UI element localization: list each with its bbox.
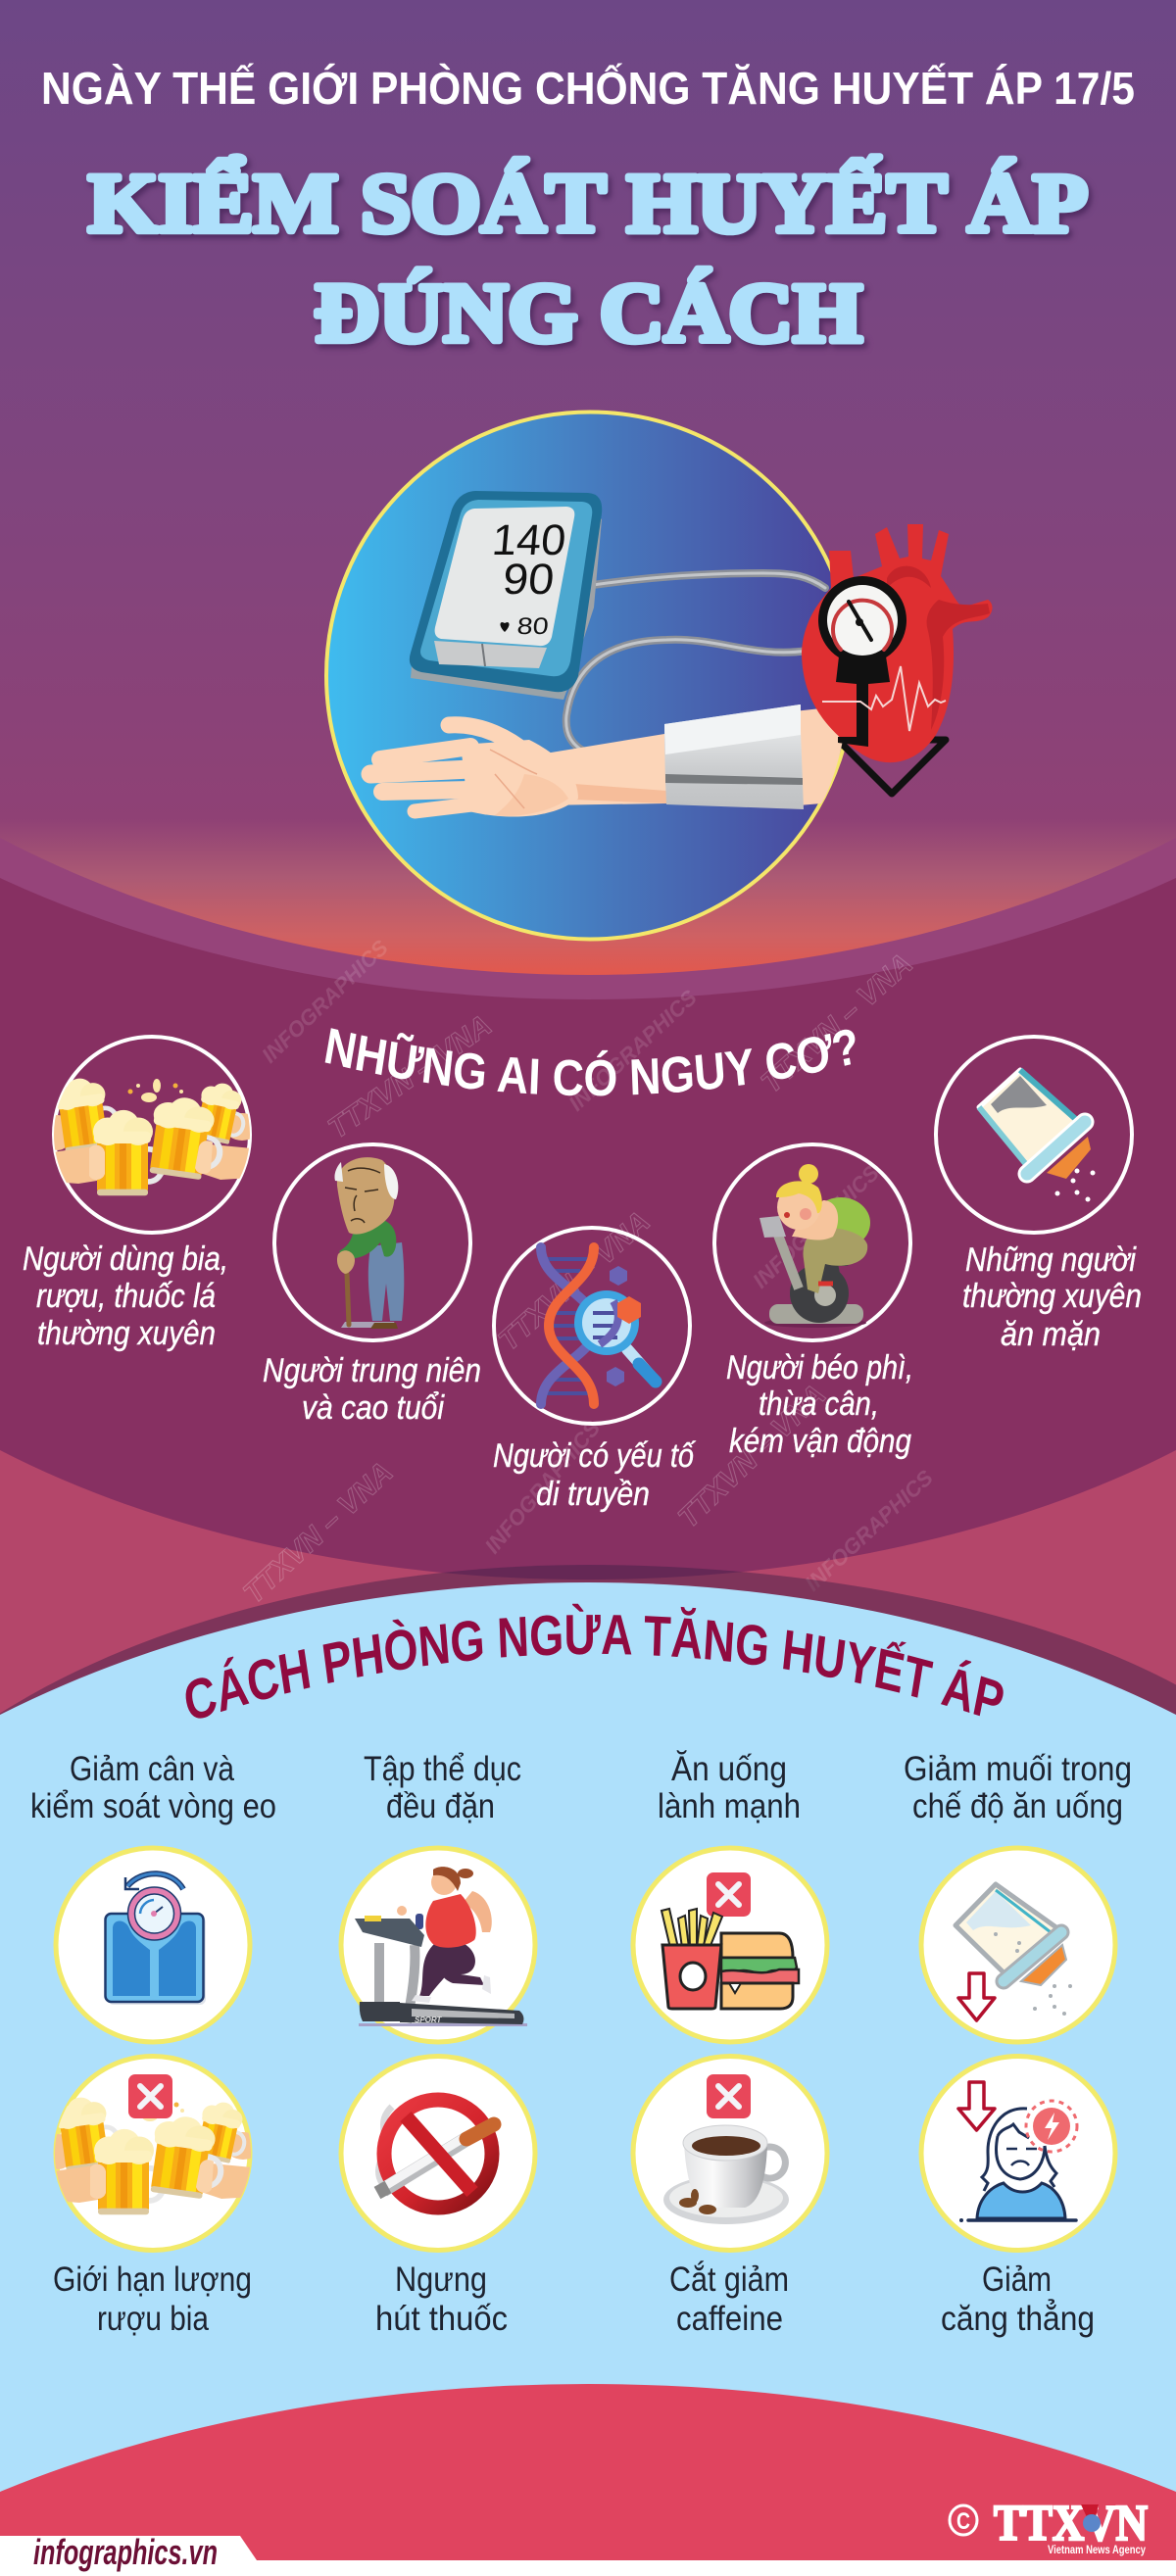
watermarks: TTXVN – VNA (237, 1456, 399, 1610)
prevention 2: exercise: Tập thể dục (364, 1750, 521, 1788)
prevention 6: stop smoking: hút thuốc (375, 2300, 508, 2338)
heading: those at risk: NHỮNG AI CÓ NGUY CƠ? (325, 1028, 855, 1095)
prevention 4: less salt: Giảm muối trong (904, 1750, 1132, 1788)
panel: dome shadow (0, 1565, 1176, 1862)
risk 1: beer and alcohol: thường xuyên (37, 1315, 216, 1352)
panel: lighter band (0, 0, 1176, 999)
risk 5: salty food (936, 1037, 1142, 1353)
prevention 5: limit alcohol: Giới hạn lượng (53, 2260, 252, 2299)
title: KIỂM SOÁT HUYẾT ÁP (88, 155, 1088, 250)
icon: woman on treadmill: SPORT (415, 2016, 443, 2024)
risk 5: salty food: Những người (965, 1241, 1137, 1279)
icon: scale (106, 1873, 206, 2005)
panel: risk group dark bowl (0, 686, 1176, 1580)
prevention 1: weight control (30, 1750, 276, 2042)
illustration: blood pressure monitor on arm with heart: 80 (515, 613, 550, 640)
risk 4: overweight woman on bike: Người béo phì, (726, 1349, 913, 1386)
icon: fast food with cross (662, 1872, 799, 2009)
monitor (549, 510, 602, 692)
ECG line (822, 666, 946, 731)
risk 4: overweight woman on bike: kém vận động (729, 1423, 911, 1460)
prevention 3: healthy eating (633, 1750, 827, 2042)
icon: beer with cross (45, 2074, 261, 2214)
logo: TTXVN: TTXVN (994, 2496, 1148, 2552)
cuff (664, 705, 804, 809)
heart (802, 524, 992, 762)
prevention 8: reduce stress: căng thẳng (941, 2299, 1095, 2338)
watermarks: TTXVN – VNA (322, 1009, 498, 1145)
icon: woman on treadmill (355, 1867, 527, 2026)
prevention 8: reduce stress (921, 2056, 1115, 2338)
prevention 5: limit alcohol (45, 2056, 261, 2338)
panel: footer white strip (0, 2560, 1176, 2576)
prevention 7: cut caffeine: caffeine (676, 2300, 783, 2338)
footer label: infographics.vn (0, 2532, 257, 2576)
title (88, 155, 1088, 360)
heading: how to prevent: CÁCH PHÒNG NGỪA TĂNG HUYẾT ÁP (186, 1603, 1004, 1719)
risk 1: beer and alcohol: rượu, thuốc lá (36, 1278, 216, 1315)
watermarks: INFOGRAPHICS (480, 1416, 605, 1558)
prevention 5: limit alcohol: rượu bia (97, 2300, 209, 2338)
logo: TTXVN: C (956, 2508, 970, 2535)
risk 2: elderly man: và cao tuổi (302, 1389, 445, 1427)
risk 1: beer and alcohol (23, 1037, 260, 1352)
prevention 3: healthy eating: lành mạnh (658, 1787, 801, 1825)
arm (539, 734, 666, 805)
gauge (818, 576, 906, 664)
watermarks: TTXVN – VNA (493, 1205, 657, 1357)
prevention 2: exercise: đều đặn (386, 1787, 495, 1825)
prevention 6: stop smoking (341, 2056, 535, 2338)
watermarks: TTXVN – VNA (672, 1379, 832, 1534)
prevention 4: less salt (904, 1750, 1132, 2042)
footer label: infographics.vn: infographics.vn (33, 2532, 218, 2572)
triangle arrow behind heart (838, 740, 946, 794)
logo: TTXVN: Vietnam News Agency (1048, 2543, 1146, 2556)
prevention 6: stop smoking: Ngưng (395, 2260, 487, 2299)
risk 5: salty food: thường xuyên (962, 1278, 1142, 1315)
prevention 1: weight control: Giảm cân và (70, 1750, 234, 1788)
illustration: blood pressure monitor on arm with heart: 140 (490, 516, 567, 564)
icon: coffee cup with cross (663, 2074, 789, 2224)
panel: footer red dome (0, 2384, 1176, 2560)
panel: header background (0, 0, 1176, 975)
watermarks: INFOGRAPHICS (748, 1160, 884, 1293)
prevention 7: cut caffeine (633, 2056, 827, 2338)
main blue circle (326, 412, 854, 939)
logo: TTXVN (950, 2496, 1148, 2556)
risk 3: genetics: di truyền (536, 1476, 650, 1513)
risk 4: overweight woman on bike: thừa cân, (759, 1385, 879, 1423)
hand (370, 725, 534, 811)
risk 4: overweight woman on bike (714, 1144, 913, 1460)
watermarks: INFOGRAPHICS (800, 1465, 938, 1596)
watermarks: INFOGRAPHICS (564, 985, 702, 1116)
icon: salt shaker with down arrow (956, 1884, 1072, 2020)
icon: stressed woman with down arrow (958, 2082, 1077, 2222)
risk 2: elderly man: Người trung niên (263, 1352, 481, 1389)
risk 1: beer and alcohol: Người dùng bia, (23, 1240, 228, 1278)
title: ĐÚNG CÁCH (315, 266, 862, 360)
prevention 4: less salt: chế độ ăn uống (912, 1787, 1123, 1825)
panel: prevention light blue (0, 1582, 1176, 2576)
watermarks: TTXVN – VNA (756, 948, 919, 1099)
old man (334, 1157, 404, 1329)
risk 3: genetics (493, 1228, 697, 1513)
watermarks: INFOGRAPHICS (257, 935, 393, 1068)
watermarks (237, 935, 938, 1610)
prevention 2: exercise (341, 1750, 535, 2042)
DNA and magnifier (541, 1247, 656, 1404)
salt shaker (979, 1070, 1096, 1201)
icon: no smoking (377, 2100, 494, 2208)
risk 3: genetics: Người có yếu tố (493, 1437, 697, 1475)
prevention 3: healthy eating: Ăn uống (671, 1750, 787, 1788)
prevention 1: weight control: kiểm soát vòng eo (30, 1787, 276, 1825)
risk 5: salty food: ăn mặn (1001, 1316, 1101, 1353)
illustration: blood pressure monitor on arm with heart: 90 (501, 556, 556, 604)
illustration: blood pressure monitor on arm with heart (326, 412, 992, 939)
prevention 7: cut caffeine: Cắt giảm (669, 2260, 789, 2299)
prevention 8: reduce stress: Giảm (982, 2260, 1052, 2299)
risk 2: elderly man (263, 1144, 481, 1427)
woman on exercise bike (760, 1164, 870, 1328)
tubes (566, 573, 825, 765)
